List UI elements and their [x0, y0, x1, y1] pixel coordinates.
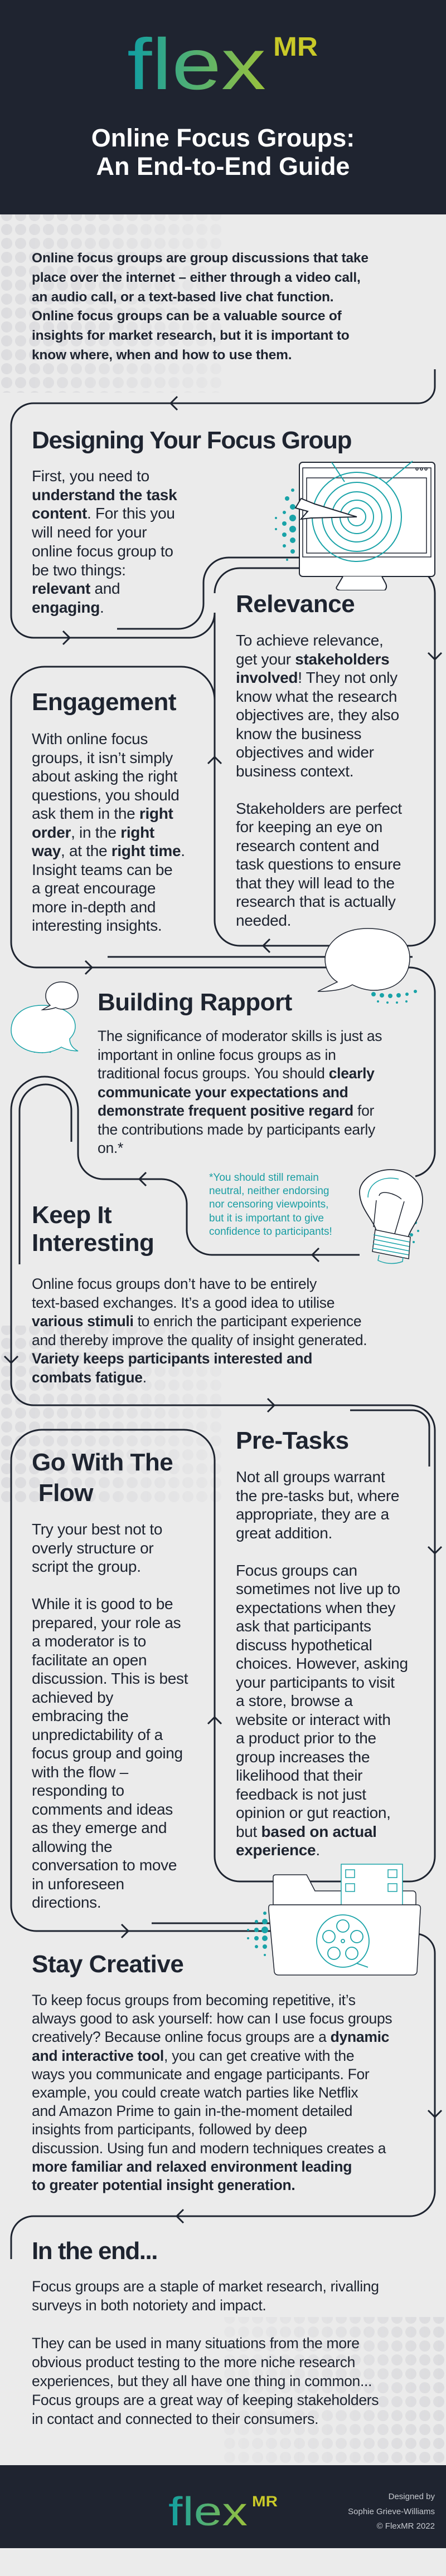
credits: © FlexMR 2022 [377, 2521, 435, 2531]
intro text: Online focus groups can be a valuable source of [32, 309, 342, 324]
text: designing: relevant and [32, 580, 120, 597]
intro text [32, 251, 369, 363]
text: stay creative: insights from participants, followed by deep [32, 2121, 307, 2138]
text: pre-tasks: ask that participants [236, 1617, 371, 1635]
heading: pre-tasks: Pre-Tasks [236, 1427, 349, 1454]
heading: stay creative: Stay Creative [32, 1951, 183, 1978]
text: relevance: know the business [236, 725, 361, 742]
text: relevance: research content and [236, 837, 379, 854]
callout: footnote: *You should still remain [209, 1172, 319, 1184]
heading: in the end: In the end... [32, 2237, 157, 2265]
text: stay creative: and interactive tool, you can get creative with the [32, 2047, 354, 2064]
text: keep it interesting: various stimuli to enrich the participant experience [32, 1313, 361, 1329]
text: in the end: surveys in both notoriety and impact. [32, 2297, 266, 2314]
text: relevance: objectives are, they also [236, 706, 399, 724]
text: designing: will need for your [32, 524, 147, 541]
text: pre-tasks [236, 1468, 408, 1859]
heading: building rapport: Building Rapport [98, 989, 292, 1016]
credits: Sophie Grieve-Williams [348, 2506, 435, 2516]
text: pre-tasks: great addition. [236, 1524, 332, 1542]
text: stay creative: more familiar and relaxed environment leading [32, 2158, 352, 2175]
text: designing: understand the task [32, 486, 177, 504]
title [91, 124, 355, 180]
heading: go with the flow: Go With The [32, 1449, 173, 1476]
text: go with the flow: conversation to move [32, 1856, 177, 1874]
title: An End-to-End Guide [96, 152, 350, 180]
text: in the end: Focus groups are a great way of keeping stakeholders [32, 2392, 379, 2408]
text: go with the flow: unpredictability of a [32, 1726, 163, 1743]
text: relevance: know what the research [236, 687, 397, 705]
text: in the end [32, 2278, 379, 2427]
text: in the end: obvious product testing to the more niche research [32, 2354, 355, 2370]
icon: speech bubble [318, 928, 417, 1004]
text: pre-tasks: your participants to visit [236, 1673, 395, 1691]
text: relevance: research that is actually [236, 893, 396, 910]
text: stay creative [32, 1992, 392, 2193]
text: stay creative: creatively? Because online focus groups are a dynamic [32, 2028, 389, 2045]
text: pre-tasks: experience. [236, 1841, 320, 1859]
text: engagement: ask them in the right [32, 805, 173, 822]
text: go with the flow: discussion. This is best [32, 1670, 188, 1687]
text: go with the flow: achieved by [32, 1689, 113, 1705]
text: stay creative: and Amazon Prime to gain in-the-moment detailed [32, 2103, 352, 2119]
text: stay creative: To keep focus groups from becoming repetitive, it’s [32, 1992, 356, 2008]
footer logo: MR [252, 2493, 278, 2510]
text: go with the flow: as they emerge and [32, 1819, 167, 1836]
text: relevance: task questions to ensure [236, 856, 401, 873]
text: pre-tasks: expectations when they [236, 1599, 395, 1616]
text: in the end: in contact and connected to their consumers. [32, 2411, 318, 2427]
heading: go with the flow [32, 1449, 173, 1507]
text: engagement: more in-depth and [32, 898, 156, 916]
text: go with the flow: directions. [32, 1894, 101, 1911]
footer logo: flex [168, 2490, 248, 2534]
text: go with the flow [32, 1521, 188, 1911]
heading: keep it interesting: Keep It [32, 1201, 112, 1229]
text: pre-tasks: group increases the [236, 1748, 370, 1766]
text: in the end: experiences, but they all have one thing in common... [32, 2373, 372, 2389]
intro text: an audio call, or a text-based live chat function. [32, 290, 333, 305]
callout: footnote: neutral, neither endorsing [209, 1185, 329, 1197]
text: relevance [236, 632, 402, 929]
text: building rapport: communicate your expectations and [98, 1084, 348, 1101]
text: designing: engaging. [32, 599, 104, 616]
text: pre-tasks: feedback is not just [236, 1786, 366, 1802]
text: pre-tasks: opinion or gut reaction, [236, 1804, 391, 1821]
text: engagement: questions, you should [32, 786, 180, 803]
text: keep it interesting: Online focus groups don’t have to be entirely [32, 1275, 317, 1292]
text: relevance: involved! They not only [236, 669, 397, 686]
text: designing: online focus group to [32, 542, 173, 560]
text: relevance: for keeping an eye on [236, 818, 382, 835]
text: pre-tasks: choices. However, asking [236, 1655, 408, 1672]
heading: go with the flow: Flow [38, 1479, 93, 1507]
text: pre-tasks: appropriate, they are a [236, 1505, 389, 1523]
text: stay creative: example, you could create watch parties like Netflix [32, 2084, 358, 2101]
text: pre-tasks: a store, browse a [236, 1692, 353, 1709]
text: go with the flow: with the flow – [32, 1763, 128, 1780]
text: building rapport: important in online focus groups as in [98, 1046, 336, 1063]
logo: MR [273, 32, 318, 62]
heading: keep it interesting [32, 1201, 154, 1257]
icon: monitor with target [275, 461, 435, 590]
text: engagement: order, in the right [32, 823, 154, 841]
text: pre-tasks: likelihood that their [236, 1767, 362, 1784]
text: go with the flow: in unforeseen [32, 1875, 124, 1893]
text: designing: be two things: [32, 561, 126, 579]
text: engagement: Insight teams can be [32, 861, 172, 878]
text: pre-tasks: discuss hypothetical [236, 1636, 372, 1653]
text: go with the flow: prepared, your role as [32, 1614, 181, 1631]
text: pre-tasks: the pre-tasks but, where [236, 1487, 399, 1504]
icon: film folder [247, 1864, 421, 1976]
text: pre-tasks: sometimes not live up to [236, 1580, 400, 1597]
callout: footnote [209, 1172, 332, 1238]
text: go with the flow: While it is good to be [32, 1595, 173, 1612]
text: building rapport: the contributions made by participants early [98, 1121, 375, 1137]
text: engagement: With online focus [32, 730, 148, 747]
text: stay creative: discussion. Using fun and modern techniques creates a [32, 2140, 386, 2157]
text: designing: First, you need to [32, 467, 149, 485]
text: engagement: way, at the right time. [32, 842, 185, 859]
text: relevance: get your stakeholders [236, 651, 389, 667]
text: relevance: needed. [236, 911, 291, 929]
text: building rapport: The significance of moderator skills is just as [98, 1028, 382, 1044]
text: designing: content. For this you [32, 505, 175, 522]
callout: footnote: confidence to participants! [209, 1226, 332, 1238]
text: pre-tasks: Focus groups can [236, 1562, 357, 1578]
text: relevance: To achieve relevance, [236, 632, 384, 649]
heading: relevance: Relevance [236, 590, 355, 618]
text: relevance: objectives and wider [236, 744, 374, 761]
intro text: insights for market research, but it is important to [32, 328, 350, 343]
text: keep it interesting [32, 1275, 367, 1386]
text: stay creative: always good to ask yourself: how can I use focus groups [32, 2010, 392, 2027]
text: designing [32, 467, 177, 616]
intro text: place over the internet – either through a video call, [32, 270, 361, 285]
text: engagement: a great encourage [32, 879, 156, 897]
footer logo [168, 2490, 278, 2534]
text: building rapport: demonstrate frequent positive regard for [98, 1102, 374, 1119]
text: engagement: groups, it isn’t simply [32, 749, 173, 766]
text: keep it interesting: and thereby improve the quality of insight generated. [32, 1331, 367, 1348]
intro text: Online focus groups are group discussions that take [32, 251, 369, 266]
text: keep it interesting: text-based exchanges. It’s a good idea to utilise [32, 1294, 334, 1311]
heading: keep it interesting: Interesting [32, 1229, 154, 1257]
text: stay creative: ways you communicate and engage participants. For [32, 2066, 369, 2083]
text: go with the flow: a moderator is to [32, 1632, 146, 1650]
text: in the end: Focus groups are a staple of market research, rivalling [32, 2278, 379, 2295]
text: go with the flow: facilitate an open [32, 1651, 147, 1669]
callout: footnote: nor censoring viewpoints, [209, 1199, 328, 1210]
icon: light bulb [359, 1169, 423, 1264]
text: relevance: that they will lead to the [236, 874, 395, 891]
callout: footnote: but it is important to give [209, 1213, 324, 1224]
text: keep it interesting: combats fatigue. [32, 1369, 147, 1386]
text: relevance: business context. [236, 762, 353, 780]
text: engagement [31, 730, 185, 934]
text: go with the flow: allowing the [32, 1838, 112, 1855]
text: go with the flow: Try your best not to [32, 1521, 162, 1538]
text: go with the flow: focus group and going [32, 1744, 183, 1762]
text: pre-tasks: a product prior to the [236, 1729, 376, 1747]
heading: engagement: Engagement [32, 688, 176, 716]
text: building rapport: traditional focus groups. You should clearly [98, 1065, 375, 1082]
text: pre-tasks: but based on actual [236, 1822, 377, 1840]
text: building rapport: on.* [98, 1140, 123, 1156]
icon: chat bubbles [11, 981, 79, 1053]
text: engagement: interesting insights. [32, 917, 162, 934]
text: go with the flow: overly structure or [32, 1539, 153, 1556]
header [0, 0, 446, 214]
footer [0, 2465, 446, 2548]
text: go with the flow: script the group. [32, 1558, 141, 1575]
text: go with the flow: embracing the [32, 1707, 129, 1724]
text: go with the flow: comments and ideas [32, 1800, 173, 1818]
credits [348, 2492, 435, 2531]
text: keep it interesting: Variety keeps participants interested and [32, 1350, 312, 1367]
heading: designing: Designing Your Focus Group [32, 427, 351, 454]
credits: Designed by [389, 2492, 435, 2501]
text: building rapport [98, 1028, 382, 1156]
text: relevance: Stakeholders are perfect [236, 800, 402, 817]
text: engagement: about asking the right [32, 768, 177, 785]
logo: flex [127, 23, 266, 105]
logo [127, 23, 318, 105]
intro text: know where, when and how to use them. [32, 348, 292, 363]
text: pre-tasks: website or interact with [236, 1711, 391, 1728]
text: go with the flow: responding to [32, 1782, 124, 1799]
title: Online Focus Groups: [91, 124, 355, 152]
text: stay creative: to greater potential insight generation. [32, 2177, 295, 2193]
text: in the end: They can be used in many situations from the more [32, 2335, 360, 2352]
text: pre-tasks: Not all groups warrant [236, 1468, 385, 1485]
